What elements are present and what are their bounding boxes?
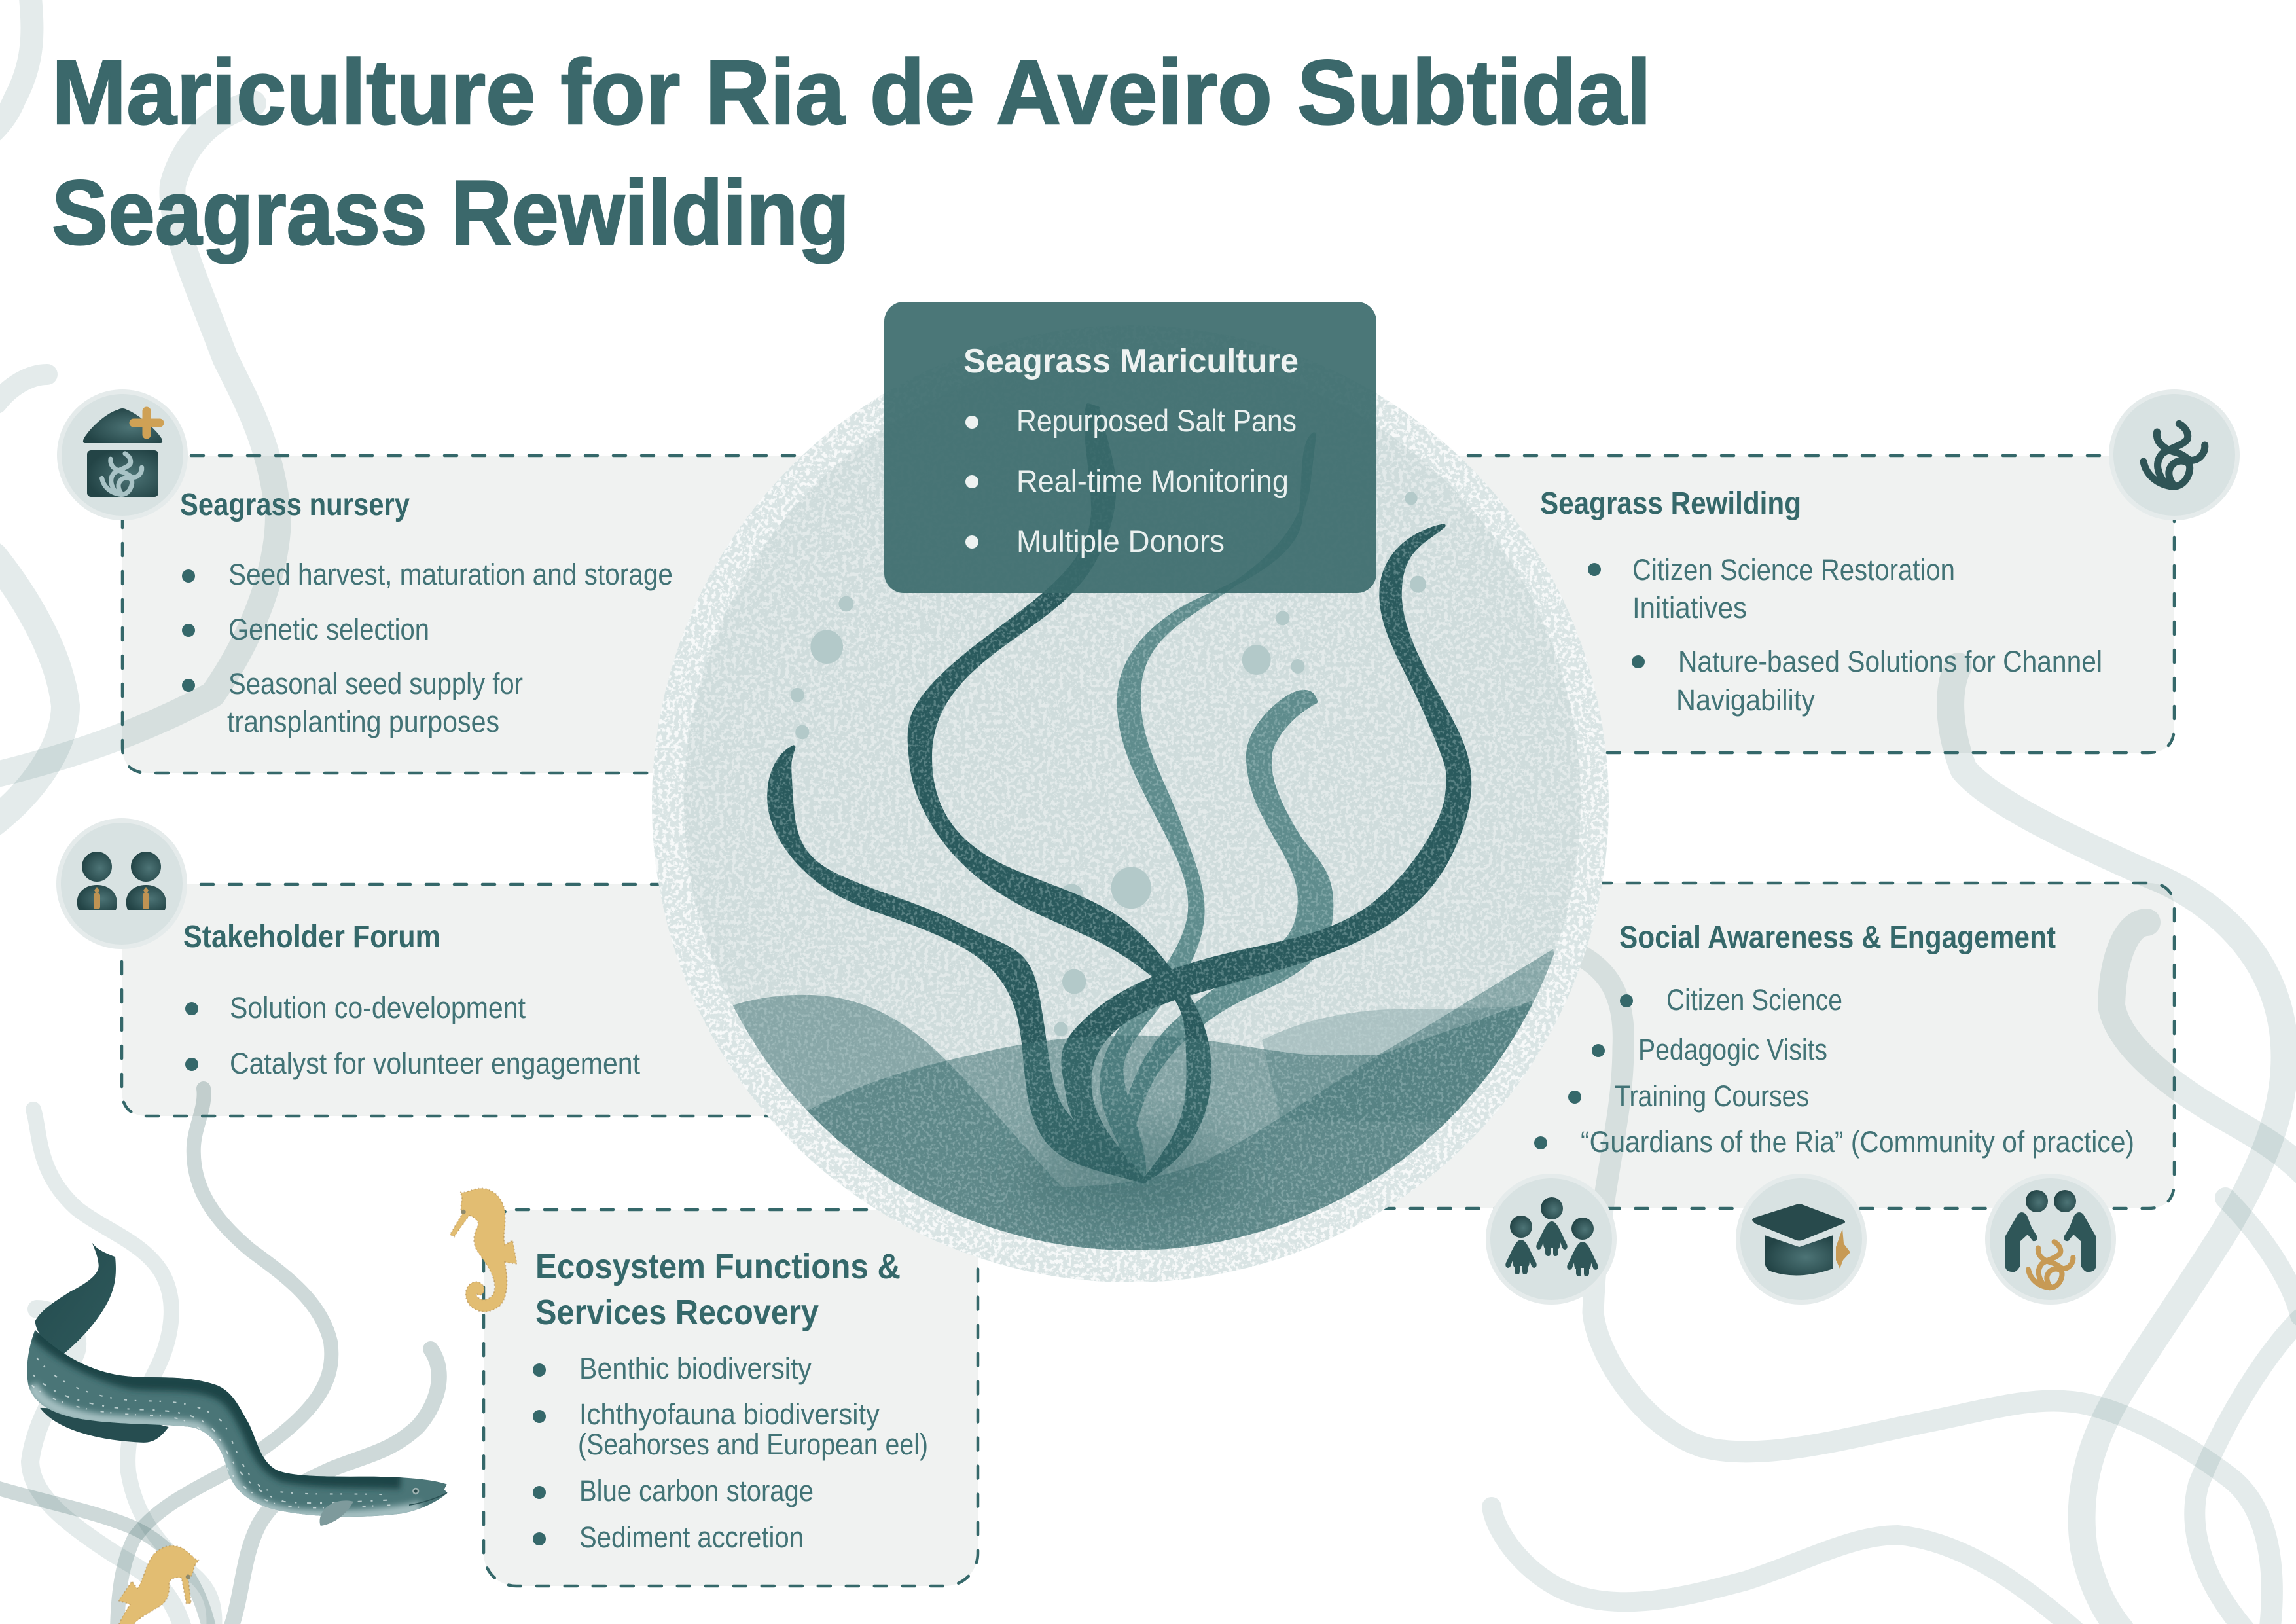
central circle illustration: seagrass meadow [652, 393, 1609, 1282]
sand hill: right [1262, 1004, 1544, 1122]
box: seagrass mariculture: Real-time Monitoring [1016, 463, 1289, 498]
panel: ecosystem functions and services recovery: (Seahorses and European eel) [578, 1428, 928, 1461]
panel: social awareness and engagement [1309, 883, 2174, 1208]
bubbles [791, 492, 1426, 1036]
illustration: seahorse on ecosystem panel [450, 1188, 517, 1312]
panel: stakeholder forum: Stakeholder Forum [183, 920, 440, 954]
icon: seagrass rewilding [2109, 389, 2240, 520]
panel: seagrass nursery [122, 456, 851, 773]
box: seagrass mariculture: Seagrass Mariculture [963, 342, 1299, 380]
sand hill: left [733, 995, 1062, 1245]
panel: seagrass nursery: transplanting purposes [227, 705, 499, 738]
panel: ecosystem functions and services recovery [484, 1210, 978, 1586]
panel: seagrass rewilding: Citizen Science Restoration [1632, 553, 1955, 586]
title: Mariculture for Ria de Aveiro Subtidal [52, 41, 1651, 143]
panel: seagrass nursery: Seasonal seed supply for [228, 667, 523, 700]
panel: seagrass rewilding: Nature-based Solutions for Channel [1678, 645, 2102, 678]
icon: stakeholders [56, 818, 187, 949]
sand mound: centre [808, 1001, 1532, 1250]
panel: ecosystem functions and services recovery: Sediment accretion [579, 1521, 804, 1554]
title: Seagrass Rewilding [52, 161, 850, 264]
panel: ecosystem functions and services recovery: Services Recovery [535, 1293, 819, 1332]
panel: seagrass nursery: Seed harvest, maturation and storage [228, 558, 673, 591]
title [52, 41, 1651, 264]
panel: social awareness and engagement: Pedagogic Visits [1638, 1033, 1827, 1066]
panel: seagrass rewilding [1440, 456, 2174, 753]
panel: seagrass rewilding: Seagrass Rewilding [1540, 486, 1801, 521]
icon: nursery house with seagrass [57, 389, 188, 520]
illustration: european eel [20, 1242, 454, 1526]
panel: ecosystem functions and services recovery: Benthic biodiversity [579, 1352, 812, 1385]
icon: citizen families [1486, 1174, 1617, 1305]
panel: seagrass nursery: Genetic selection [228, 613, 429, 646]
sand shadow at blade base [1024, 1128, 1237, 1219]
sand slope: right [1062, 949, 1554, 1250]
panel: stakeholder forum [122, 884, 851, 1116]
panel: ecosystem functions and services recovery: Ecosystem Functions & [535, 1247, 901, 1286]
panel: stakeholder forum: Solution co-development [230, 991, 526, 1024]
icon: guardians of the ria [1985, 1174, 2116, 1305]
panel: social awareness and engagement: “Guardians of the Ria” (Community of practice) [1581, 1125, 2134, 1159]
panel: social awareness and engagement: Citizen Science [1666, 983, 1842, 1017]
illustration: seahorse bottom left [99, 1532, 210, 1624]
panel: ecosystem functions and services recovery: Ichthyofauna biodiversity [579, 1398, 880, 1431]
panel: seagrass nursery: Seagrass nursery [180, 488, 410, 522]
panel: social awareness and engagement: Social Awareness & Engagement [1619, 920, 2056, 955]
panel: social awareness and engagement: Training Courses [1615, 1079, 1809, 1113]
box: seagrass mariculture: Repurposed Salt Pans [1016, 403, 1297, 438]
seagrass blades: dark [769, 405, 1469, 1182]
panel: ecosystem functions and services recovery: Blue carbon storage [579, 1474, 814, 1507]
panel: stakeholder forum: Catalyst for volunteer engagement [230, 1047, 640, 1080]
panel: seagrass rewilding: Navigability [1676, 683, 1815, 717]
seagrass blades: lighter [1102, 435, 1331, 1182]
box: seagrass mariculture: Multiple Donors [1016, 524, 1225, 558]
panel: seagrass rewilding: Initiatives [1632, 591, 1747, 624]
icon: graduation cap [1736, 1174, 1867, 1305]
box: seagrass mariculture [884, 302, 1376, 593]
